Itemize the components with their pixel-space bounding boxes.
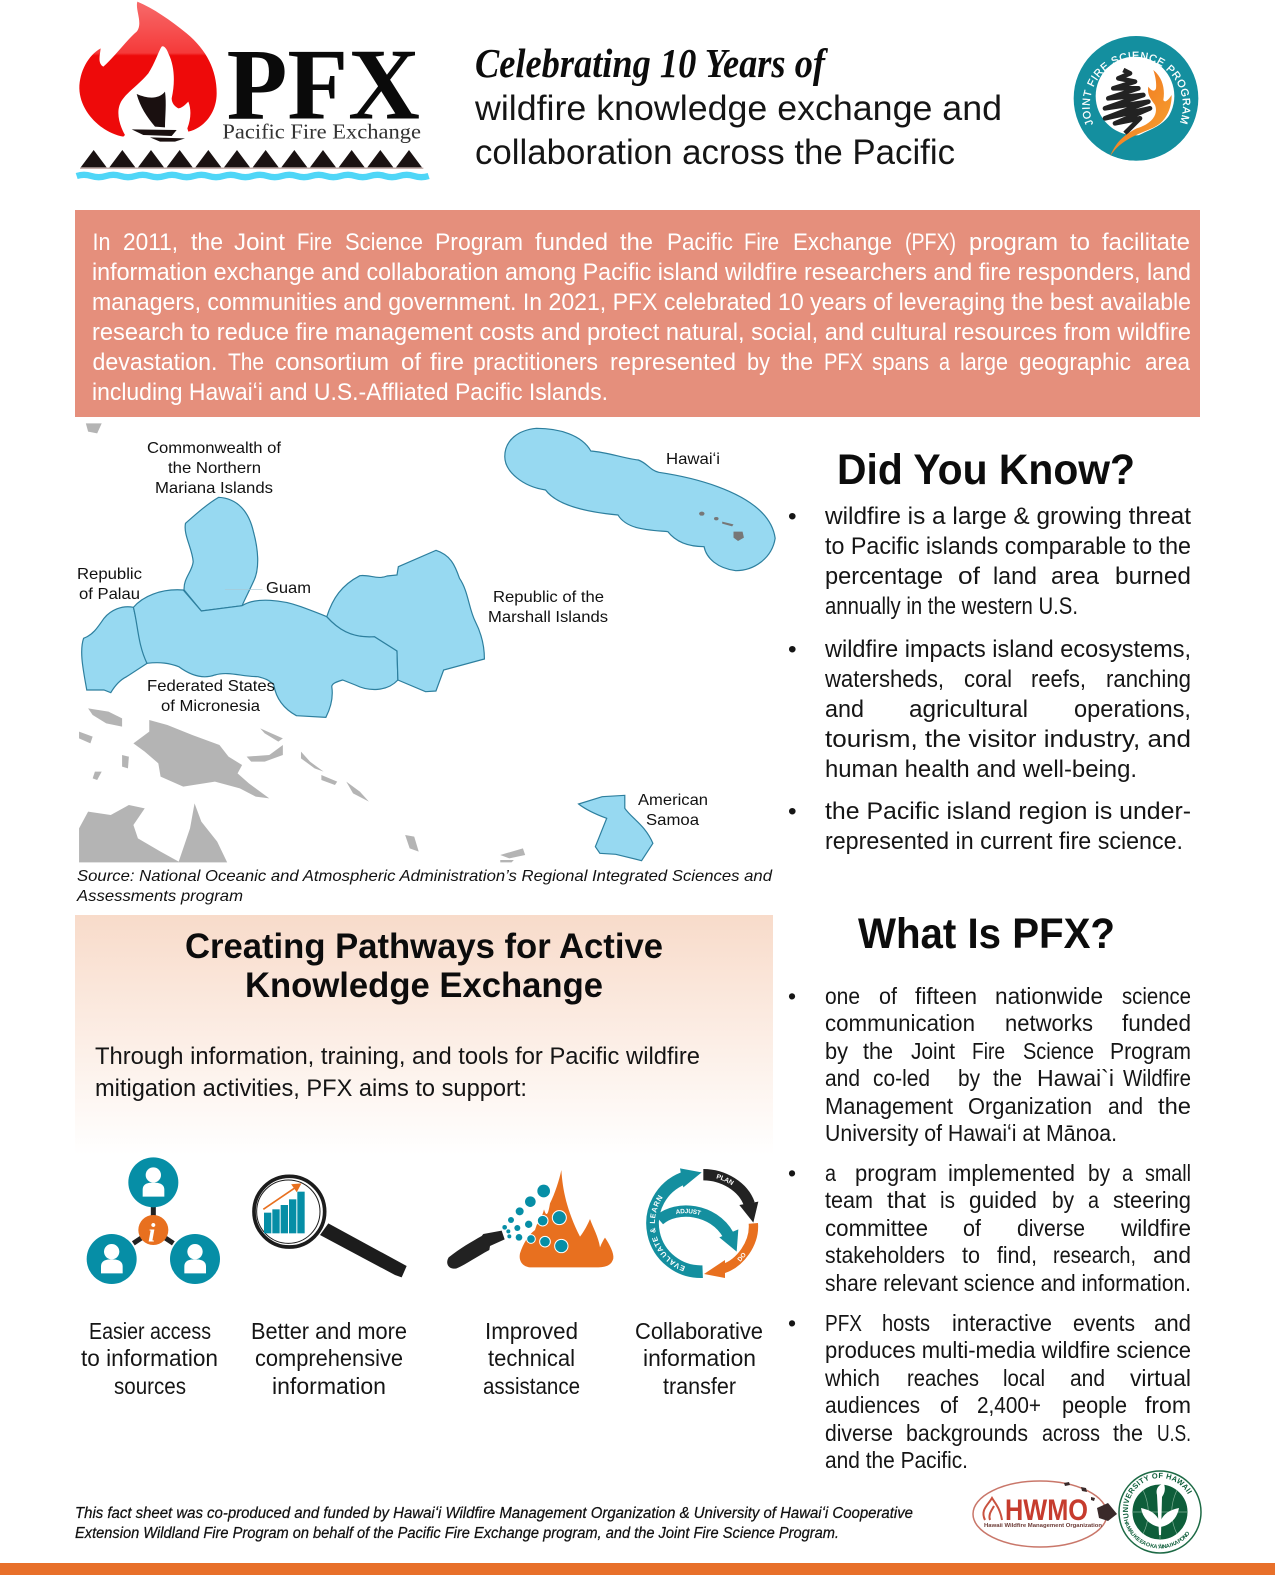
map labels: American — [638, 792, 708, 809]
bullet list: what is PFX: Hawai`i — [1037, 1065, 1114, 1091]
map labels: of Micronesia — [161, 698, 260, 715]
bullet list: what is PFX: find, — [997, 1242, 1037, 1268]
region: Hawaii — [505, 428, 775, 571]
banner line five — [92, 349, 1191, 376]
bullet list: did you know: • — [788, 636, 797, 663]
bullet list: what is PFX: one — [825, 983, 860, 1009]
banner line five: The — [228, 349, 264, 376]
banner line one: the — [620, 229, 653, 256]
wave line — [77, 175, 429, 177]
caption: better information — [251, 1318, 407, 1399]
bullet list: what is PFX: by — [1088, 1160, 1110, 1186]
icon: adaptive management cycle — [646, 1168, 758, 1278]
cycle labels: EVALUATE & LEARN — [650, 1195, 685, 1272]
bullet list: what is PFX: Fire — [972, 1038, 1005, 1064]
banner line five: of — [401, 349, 421, 376]
panel: did you know — [788, 446, 1191, 855]
HWMO logo: HWMO — [1005, 1494, 1088, 1527]
bullet list: what is PFX: virtual — [1130, 1365, 1191, 1391]
bullet list: what is PFX: funded — [1122, 1010, 1191, 1036]
banner line one: In — [92, 229, 110, 256]
bullet list: what is PFX: and — [1108, 1093, 1143, 1119]
cycle labels: ADJUST — [676, 1208, 702, 1215]
bullet list: what is PFX: • — [788, 1310, 796, 1336]
bullet list: what is PFX: Joint — [911, 1038, 956, 1064]
bullet list: what is PFX: backgrounds — [906, 1420, 1028, 1446]
bullet list: what is PFX: • — [788, 983, 796, 1009]
banner line one: facilitate — [1102, 229, 1190, 256]
bullet list: what is PFX: by — [958, 1065, 980, 1091]
bullet list: what is PFX: guided — [969, 1187, 1037, 1213]
Hawaiian islands — [699, 512, 744, 541]
bullet list: what is PFX: 2,400+ — [977, 1392, 1041, 1418]
bullet list: did you know: land — [993, 563, 1037, 590]
bullet list: what is PFX: reaches — [907, 1365, 979, 1391]
icon: tree — [1105, 70, 1150, 133]
heading line one: wildfire knowledge exchange and — [474, 89, 1002, 128]
footer credit text: This fact sheet was co-produced and funded by Hawaiʻi Wildfire Management Organization & University of Hawaiʻi Cooperative — [75, 1505, 913, 1522]
landmasses — [79, 423, 525, 862]
bullet list: did you know — [788, 503, 1191, 855]
HWMO logo — [973, 1481, 1117, 1547]
panel intro text — [95, 1043, 700, 1102]
bullet list: did you know: human health and well-being. — [825, 756, 1137, 783]
banner line one: to — [1070, 229, 1090, 256]
intro banner — [75, 210, 1200, 417]
bullet list: did you know: the Pacific island region is under- — [825, 798, 1191, 825]
caption: easier access — [81, 1318, 218, 1399]
script tagline: Celebrating 10 Years of — [475, 40, 829, 86]
caption: technical assistance — [483, 1318, 580, 1399]
bullet list: what is PFX: the — [1113, 1420, 1143, 1446]
PFX wordmark: PFX — [227, 27, 420, 140]
bullet list: did you know: reefs, — [1031, 666, 1086, 693]
footer credit text — [75, 1505, 913, 1542]
bullet list: what is PFX: by — [825, 1038, 848, 1064]
triangle pattern — [81, 150, 422, 167]
bullet list: did you know: annually in the western U.S. — [825, 593, 1078, 620]
map labels — [77, 440, 720, 829]
region: Federated States of Micronesia — [133, 590, 398, 717]
panel: creating pathways — [75, 915, 773, 1399]
heading — [474, 40, 1002, 172]
bullet list: did you know: percentage — [825, 563, 943, 590]
bullet list: what is PFX: Management — [825, 1093, 954, 1119]
bullet list: what is PFX: the — [993, 1065, 1022, 1091]
panel: what is PFX — [788, 910, 1191, 1473]
bullet list: what is PFX: • — [788, 1160, 796, 1186]
footer credit text: Extension Wildland Fire Program on behalf of the Pacific Fire Exchange program, and the Joint Fire Science Program. — [75, 1525, 839, 1542]
panel title: Knowledge Exchange — [245, 966, 603, 1005]
bullet list: what is PFX: Science — [1023, 1038, 1094, 1064]
banner line one: Joint — [234, 229, 285, 256]
panel title — [185, 927, 663, 1005]
banner line five: a — [939, 349, 951, 376]
bullet list: did you know: agricultural — [909, 696, 1028, 723]
bullet list: what is PFX: Organization — [968, 1093, 1092, 1119]
University of Hawaii seal: HA MAU KE EA O KA ʻĀINA I KA PONO — [1124, 1519, 1189, 1548]
bullet list: what is PFX: produces multi-media wildfire science — [825, 1337, 1191, 1363]
Pacific Fire Exchange name: Pacific Fire Exchange — [222, 119, 421, 143]
bullet list: did you know: and — [825, 696, 864, 723]
bullet list: what is PFX: science — [1122, 983, 1191, 1009]
bullet list: what is PFX: across — [1042, 1420, 1100, 1446]
icon: flame with canoe — [79, 2, 217, 142]
bullet list: what is PFX: research, — [1053, 1242, 1136, 1268]
bullet list: what is PFX: and the Pacific. — [825, 1447, 968, 1473]
bullet list: what is PFX: and — [1153, 1242, 1191, 1268]
banner line one: Pacific — [667, 229, 733, 256]
bullet list: what is PFX: and — [825, 1065, 860, 1091]
banner line five: spans — [872, 349, 929, 376]
bullet list: what is PFX: a — [825, 1160, 836, 1186]
bullet list: what is PFX: is — [940, 1187, 955, 1213]
caption: technical assistance: assistance — [483, 1373, 580, 1399]
PFX logo — [77, 2, 429, 177]
HWMO logo: Hawaii Wildfire Management Organization — [984, 1523, 1103, 1529]
bullet list: what is PFX: and — [1154, 1310, 1191, 1336]
bullet list: did you know: burned — [1115, 563, 1191, 590]
banner line one: program — [969, 229, 1058, 256]
caption: collaborative transfer — [635, 1318, 763, 1399]
bullet list: what is PFX: from — [1145, 1392, 1191, 1418]
bullet list: what is PFX: fifteen — [915, 983, 977, 1009]
map labels: Republic of the — [493, 589, 604, 606]
bullet list: what is PFX: committee — [825, 1215, 928, 1241]
bullet list: did you know: wildfire is a large & growing threat — [824, 503, 1191, 530]
bullet list: what is PFX: diverse — [1017, 1215, 1085, 1241]
heading: what is PFX: What Is PFX? — [858, 910, 1115, 958]
caption: better information: information — [272, 1373, 386, 1399]
banner line five: area — [1145, 349, 1191, 376]
bullet list: did you know: • — [788, 503, 797, 530]
bullet list: what is PFX: nationwide — [995, 983, 1103, 1009]
bullet list: what is PFX: networks — [1005, 1010, 1093, 1036]
bottom orange bar — [0, 1563, 1275, 1575]
cycle labels: PLAN — [716, 1174, 734, 1186]
banner line five: PFX — [824, 349, 863, 376]
intro banner: managers, communities and government. In 2021, PFX celebrated 10 years of leveraging the best available — [92, 289, 1191, 316]
bullet list: what is PFX: local — [1003, 1365, 1045, 1391]
bullet list: what is PFX: small — [1145, 1160, 1191, 1186]
bullet list: what is PFX: which — [824, 1365, 880, 1391]
bullet list: did you know: ranching — [1106, 666, 1191, 693]
map labels: Mariana Islands — [155, 480, 273, 497]
bullet list: what is PFX: Wildfire — [1123, 1065, 1191, 1091]
bullet list: what is PFX: co-led — [873, 1065, 930, 1091]
banner line one: funded — [535, 229, 608, 256]
bullet list: did you know: • — [788, 798, 797, 825]
banner line five: practitioners — [473, 349, 598, 376]
bullet list: what is PFX: University of Hawaiʻi at Mānoa. — [825, 1120, 1117, 1146]
map source caption: Source: National Oceanic and Atmospheric Administration’s Regional Integrated Sciences and — [77, 868, 773, 885]
heading: did you know: Did You Know? — [837, 446, 1135, 494]
bullet list: what is PFX: interactive — [952, 1310, 1052, 1336]
map labels: Marshall Islands — [488, 609, 608, 626]
banner line one: Fire — [744, 229, 779, 256]
panel intro text: Through information, training, and tools for Pacific wildfire — [95, 1043, 700, 1070]
map labels: Commonwealth of — [147, 440, 282, 457]
bullet list: what is PFX: events — [1073, 1310, 1135, 1336]
banner line one: 2011, — [123, 229, 178, 256]
banner line five: fire — [430, 349, 464, 376]
bullet list: what is PFX: of — [879, 983, 898, 1009]
cycle labels: DO — [736, 1251, 748, 1263]
banner line one: Fire — [297, 229, 332, 256]
banner line one: Program — [435, 229, 523, 256]
bullet list: did you know: watersheds, — [824, 666, 944, 693]
region: Marshall Islands — [327, 550, 484, 692]
intro banner: including Hawaiʻi and U.S.-Affliated Pacific Islands. — [92, 379, 608, 406]
bullet list: what is PFX: the — [863, 1038, 893, 1064]
bullet list: what is PFX: people — [1062, 1392, 1127, 1418]
map labels: Hawaiʻi — [666, 451, 720, 468]
bullet list: what is PFX: stakeholders — [825, 1242, 945, 1268]
banner line one: (PFX) — [905, 229, 956, 256]
icon: information network: i — [148, 1218, 156, 1248]
bullet list: what is PFX: implemented — [948, 1160, 1075, 1186]
bullet list: what is PFX: that — [887, 1187, 927, 1213]
bullet list: did you know: operations, — [1074, 696, 1191, 723]
map labels: Republic — [77, 566, 142, 583]
panel title: Creating Pathways for Active — [185, 927, 663, 966]
cycle labels — [650, 1174, 748, 1272]
bullet list: did you know: coral — [964, 666, 1012, 693]
bullet list: what is PFX: and — [1070, 1365, 1105, 1391]
bullet list: what is PFX: to — [962, 1242, 980, 1268]
bullet list: what is PFX — [788, 983, 1191, 1473]
map regions — [79, 423, 775, 862]
map labels: Federated States — [147, 678, 275, 695]
bullet list: what is PFX: a — [1088, 1187, 1099, 1213]
bullet list: did you know: wildfire impacts island ecosystems, — [824, 636, 1191, 663]
map labels: of Palau — [79, 586, 140, 603]
University of Hawaii seal: UNIVERSITY OF HAWAII — [1122, 1472, 1192, 1518]
intro banner: research to reduce fire management costs and protect natural, social, and cultural resources from wildfire — [92, 319, 1191, 346]
bullet list: what is PFX: communication — [825, 1010, 975, 1036]
University of Hawaii seal — [1118, 1470, 1202, 1554]
banner line five: devastation. — [92, 349, 218, 376]
banner line five: the — [781, 349, 813, 376]
icon: flame swoosh — [1110, 70, 1172, 157]
bullet list: what is PFX: Program — [1110, 1038, 1191, 1064]
banner line one — [92, 229, 1190, 256]
bullet list: what is PFX: U.S. — [1157, 1420, 1191, 1446]
caption: better information: comprehensive — [255, 1345, 403, 1371]
intro banner: information exchange and collaboration among Pacific island wildfire researchers and fire responders, land — [92, 259, 1191, 286]
banner line five: by — [747, 349, 770, 376]
bullet list: what is PFX: a — [1122, 1160, 1133, 1186]
caption: easier access: Easier access — [89, 1318, 211, 1344]
banner line five: represented — [610, 349, 736, 376]
map labels: Samoa — [646, 812, 699, 829]
bullet list: what is PFX: diverse — [825, 1420, 893, 1446]
bullet list: what is PFX: audiences — [825, 1392, 920, 1418]
caption: easier access: sources — [114, 1373, 186, 1399]
banner line one: Exchange — [793, 229, 892, 256]
caption: collaborative transfer: information — [643, 1345, 756, 1371]
bullet list: did you know: tourism, the visitor industry, and — [825, 726, 1191, 753]
icon: magnifying glass with chart — [254, 1176, 407, 1277]
caption: collaborative transfer: Collaborative — [635, 1318, 763, 1344]
caption: collaborative transfer: transfer — [663, 1373, 736, 1399]
bullet list: what is PFX: PFX — [825, 1310, 862, 1336]
bullet list: what is PFX: team — [825, 1187, 873, 1213]
bullet list: what is PFX: the — [1158, 1093, 1191, 1119]
bullet list: did you know: to Pacific islands comparable to the — [825, 533, 1191, 560]
panel intro text: mitigation activities, PFX aims to support: — [95, 1075, 527, 1102]
banner line one: Science — [345, 229, 423, 256]
region: Palau — [82, 607, 147, 693]
icon: hose and flames — [447, 1170, 613, 1269]
region: Northern Mariana Islands and Guam — [184, 497, 258, 611]
bullet list: what is PFX: share relevant science and information. — [825, 1270, 1191, 1296]
logo ring text: JOINT FIRE SCIENCE PROGRAM — [1082, 52, 1190, 125]
Joint Fire Science Program logo — [1074, 36, 1198, 161]
icon: information network — [87, 1157, 220, 1284]
caption: better information: Better and more — [251, 1318, 407, 1344]
map — [76, 423, 775, 905]
caption: easier access: to information — [81, 1345, 218, 1371]
bullet list: what is PFX: wildfire — [1120, 1215, 1191, 1241]
banner line one: the — [191, 229, 223, 256]
bullet list: what is PFX: by — [1052, 1187, 1074, 1213]
banner line five: geographic — [1019, 349, 1131, 376]
caption: technical assistance: technical — [488, 1345, 575, 1371]
heading line two: collaboration across the Pacific — [475, 133, 955, 172]
banner line five: large — [960, 349, 1008, 376]
bullet list: did you know: area — [1051, 563, 1099, 590]
bullet list: what is PFX: hosts — [882, 1310, 930, 1336]
map source caption — [76, 868, 773, 905]
Guam leader line — [225, 589, 262, 591]
bullet list: what is PFX: of — [963, 1215, 982, 1241]
bullet list: what is PFX: steering — [1113, 1187, 1191, 1213]
map labels: Guam — [266, 580, 311, 597]
map labels: the Northern — [168, 460, 261, 477]
bullet list: did you know: of — [958, 563, 980, 590]
bullet list: what is PFX: program — [855, 1160, 937, 1186]
map source caption: Assessments program — [76, 888, 243, 905]
bullet list: did you know: represented in current fire science. — [825, 828, 1183, 855]
region: American Samoa — [579, 795, 653, 861]
bullet list: what is PFX: of — [940, 1392, 959, 1418]
caption: technical assistance: Improved — [485, 1318, 578, 1344]
banner line five: consortium — [275, 349, 389, 376]
